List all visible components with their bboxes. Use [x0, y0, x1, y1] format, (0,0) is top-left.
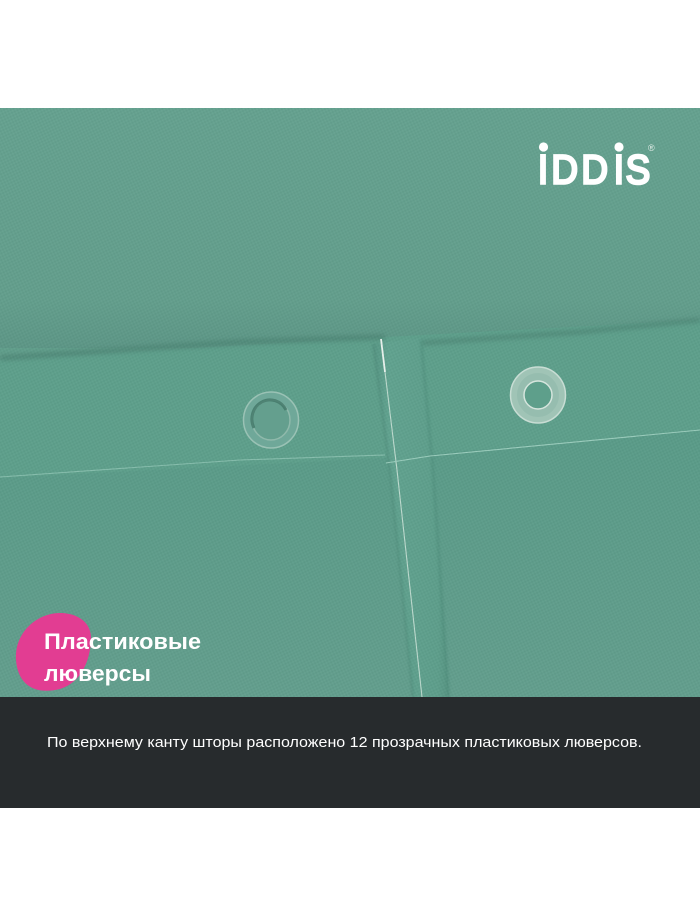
logo: IDDIS: IDDIS [538, 148, 650, 193]
curtain hem band [0, 320, 700, 697]
photo: green curtain fabric [0, 108, 700, 697]
icon: right eyelet [510, 367, 566, 423]
pink blob accent [16, 613, 91, 691]
heading: люверсы [44, 661, 151, 686]
caption band [0, 697, 700, 808]
caption text: По верхнему канту шторы расположено 12 прозрачных пластиковых люверсов. [47, 734, 642, 751]
icon: left eyelet [244, 392, 298, 448]
heading [44, 629, 201, 686]
heading: Пластиковые [44, 629, 201, 654]
logo: IDDIS: ® [648, 143, 655, 153]
vertical seam flap [373, 338, 449, 697]
stitching lines [0, 339, 700, 697]
